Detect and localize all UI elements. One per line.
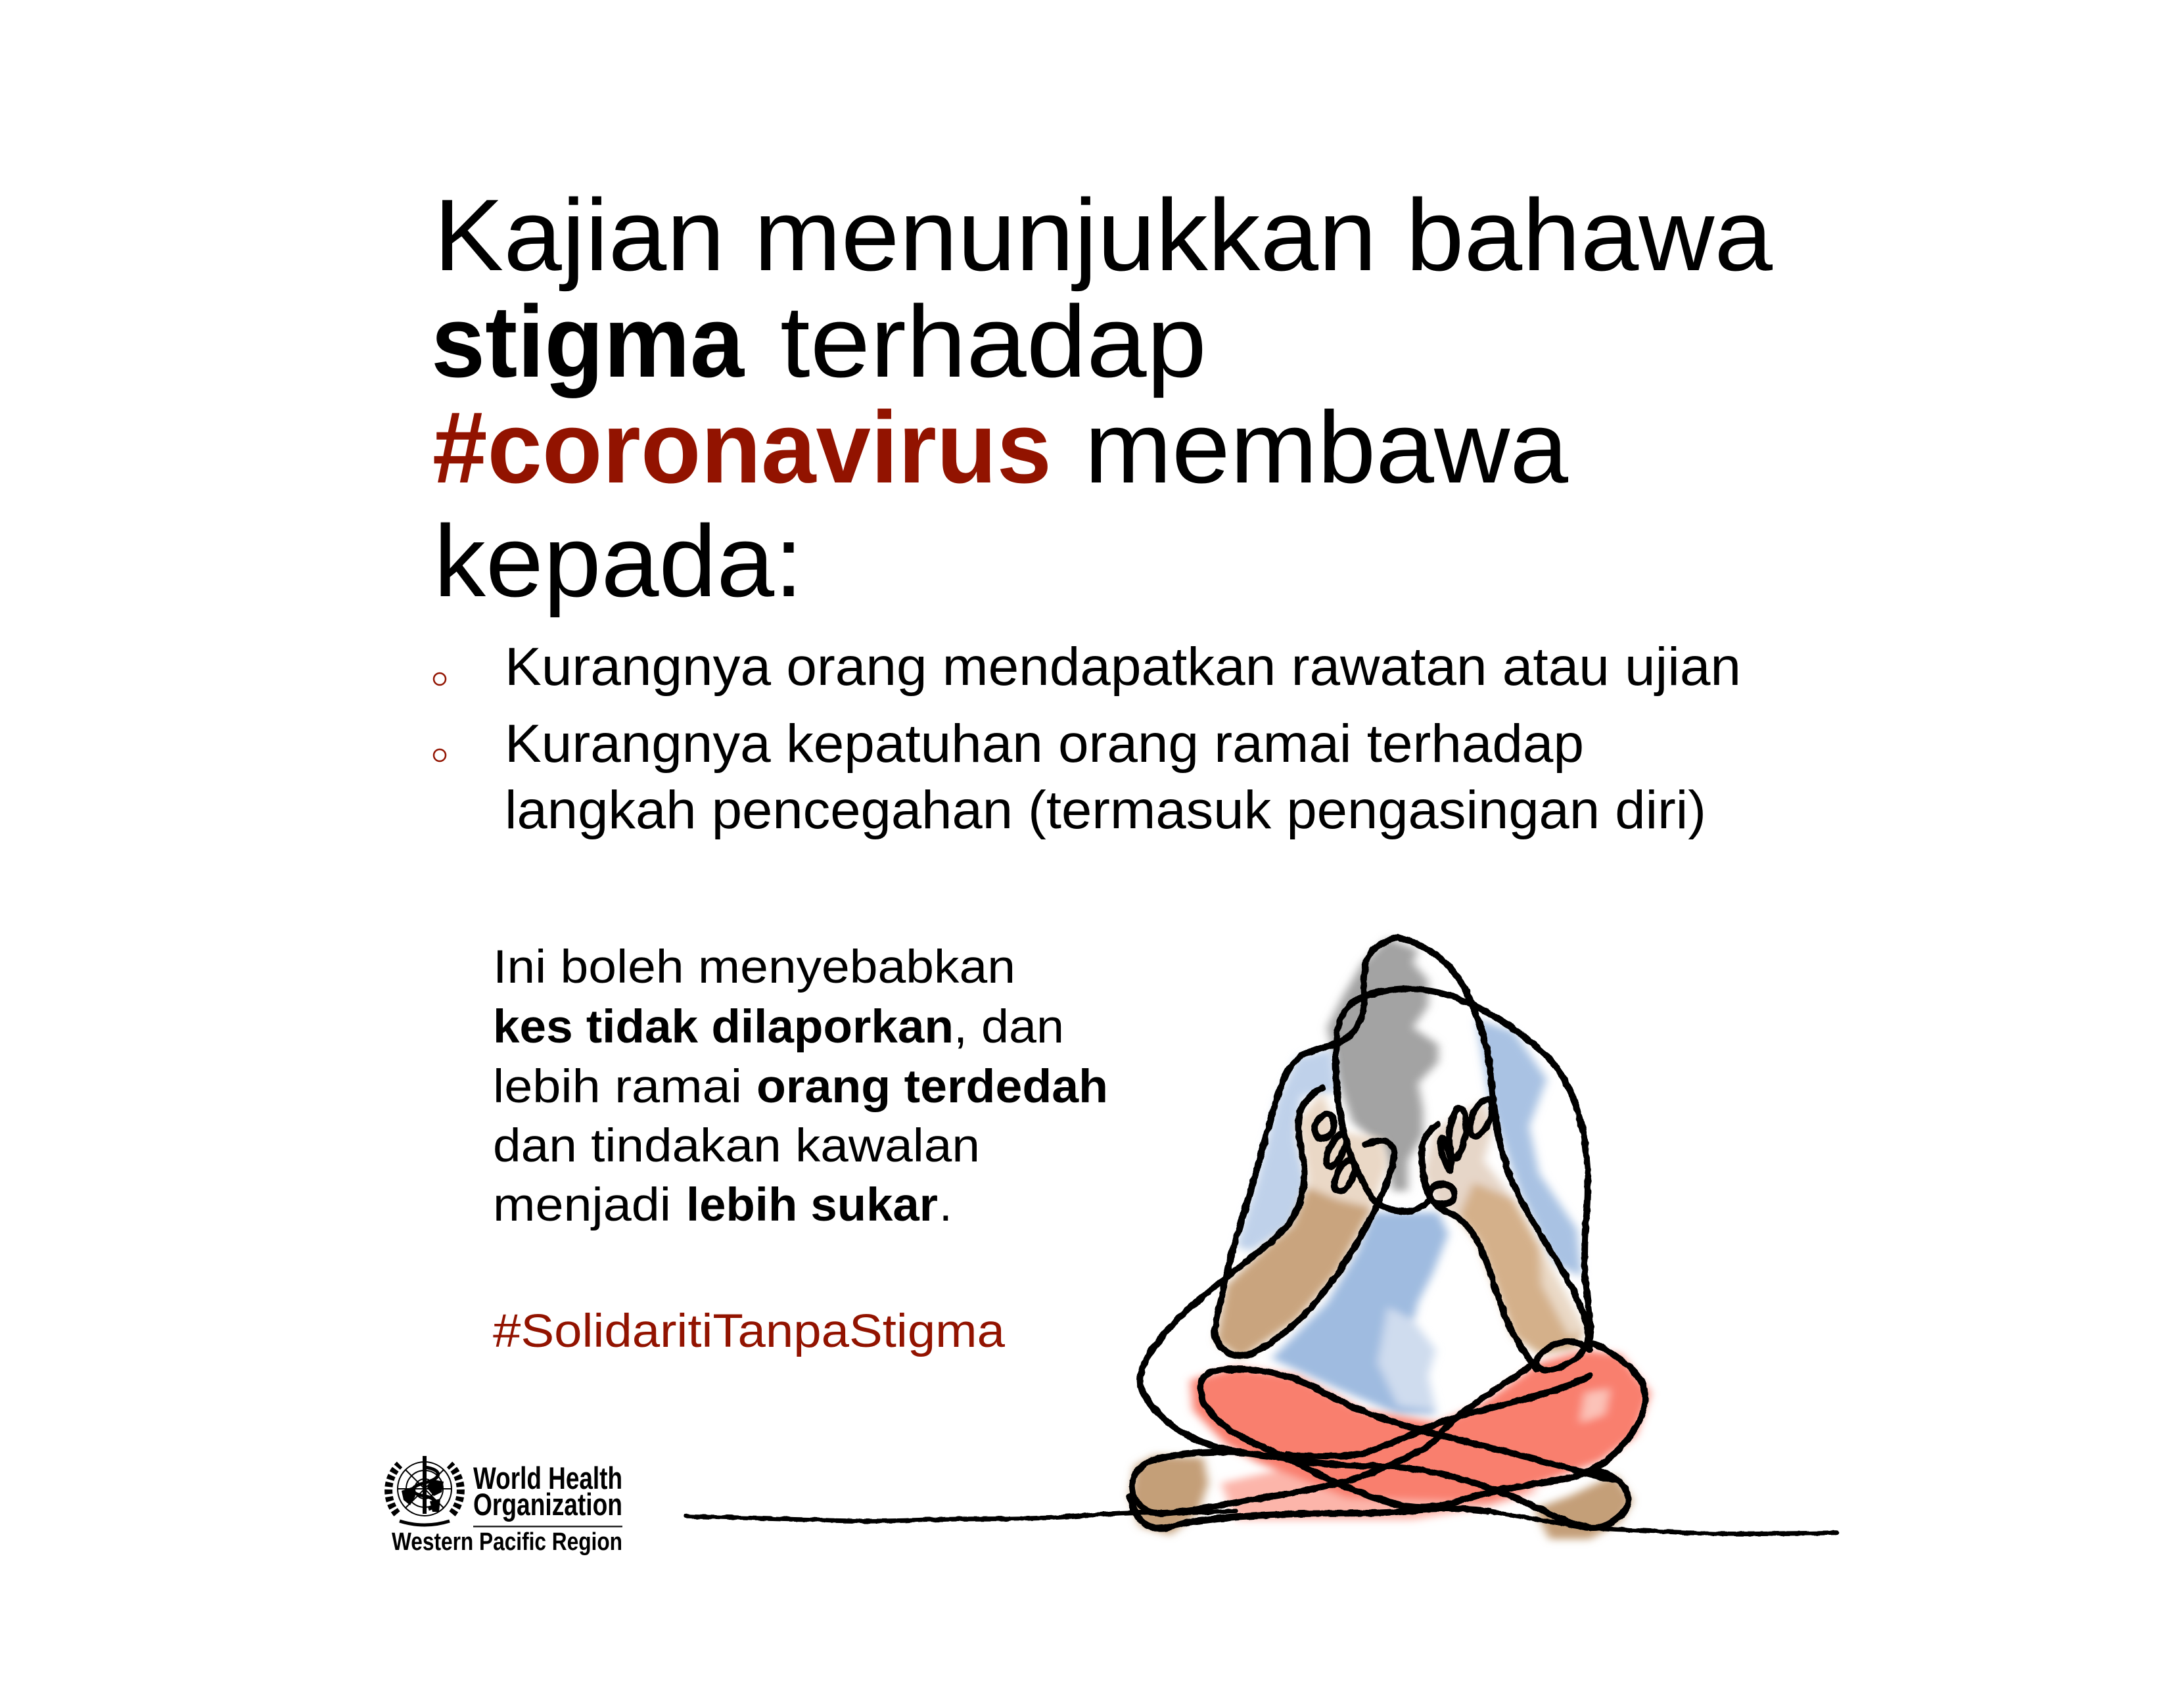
- bullet marker 2: [434, 749, 446, 761]
- illustration: seated person holding head: [687, 937, 1838, 1539]
- watercolour: hair: [1327, 938, 1438, 1191]
- icon: WHO emblem: [388, 1456, 461, 1525]
- logo wordmark: Organization: [473, 1487, 622, 1522]
- body paragraph: kes tidak dilaporkan: [493, 1001, 954, 1053]
- bullet text 1: Kurangnya orang mendapatkan rawatan atau ujian: [505, 637, 1741, 697]
- watercolour: trousers: [1190, 1350, 1650, 1520]
- title: [431, 178, 1773, 618]
- hashtag: #SolidaritiTanpaStigma: [493, 1305, 1006, 1357]
- body paragraph: lebih ramai: [493, 1061, 742, 1113]
- bullet text 2: [505, 714, 1706, 840]
- body paragraph: orang terdedah: [756, 1061, 1108, 1113]
- logo: World Health Organization Western Pacific Region: [388, 1456, 622, 1556]
- title: terhadap: [780, 285, 1207, 398]
- body paragraph: Ini boleh menyebabkan: [493, 941, 1015, 993]
- body paragraph: [493, 941, 1108, 1231]
- title: stigma: [431, 285, 745, 398]
- watercolour: shirt: [1236, 1019, 1582, 1415]
- watercolour: arms and hands: [1216, 1092, 1585, 1359]
- continuous line drawing: [687, 937, 1838, 1534]
- title: membawa: [1084, 390, 1569, 504]
- watercolour: feet: [1130, 1455, 1633, 1539]
- bullet text 2: langkah pencegahan (termasuk pengasingan diri): [505, 780, 1706, 840]
- body paragraph: dan tindakan kawalan: [493, 1120, 980, 1172]
- title: kepada:: [434, 504, 803, 618]
- bullet text 2: Kurangnya kepatuhan orang ramai terhadap: [505, 714, 1584, 774]
- body paragraph: .: [939, 1179, 952, 1231]
- bullet marker 1: [434, 673, 446, 685]
- logo wordmark: Western Pacific Region: [392, 1528, 622, 1556]
- body paragraph: lebih sukar: [686, 1179, 938, 1231]
- logo wordmark: World Health: [473, 1461, 622, 1495]
- body paragraph: menjadi: [493, 1179, 671, 1231]
- title: Kajian menunjukkan bahawa: [434, 178, 1773, 292]
- logo wordmark: [392, 1461, 622, 1556]
- bullet list: [434, 637, 1741, 840]
- title: #coronavirus: [432, 390, 1052, 504]
- body paragraph: , dan: [954, 1001, 1064, 1053]
